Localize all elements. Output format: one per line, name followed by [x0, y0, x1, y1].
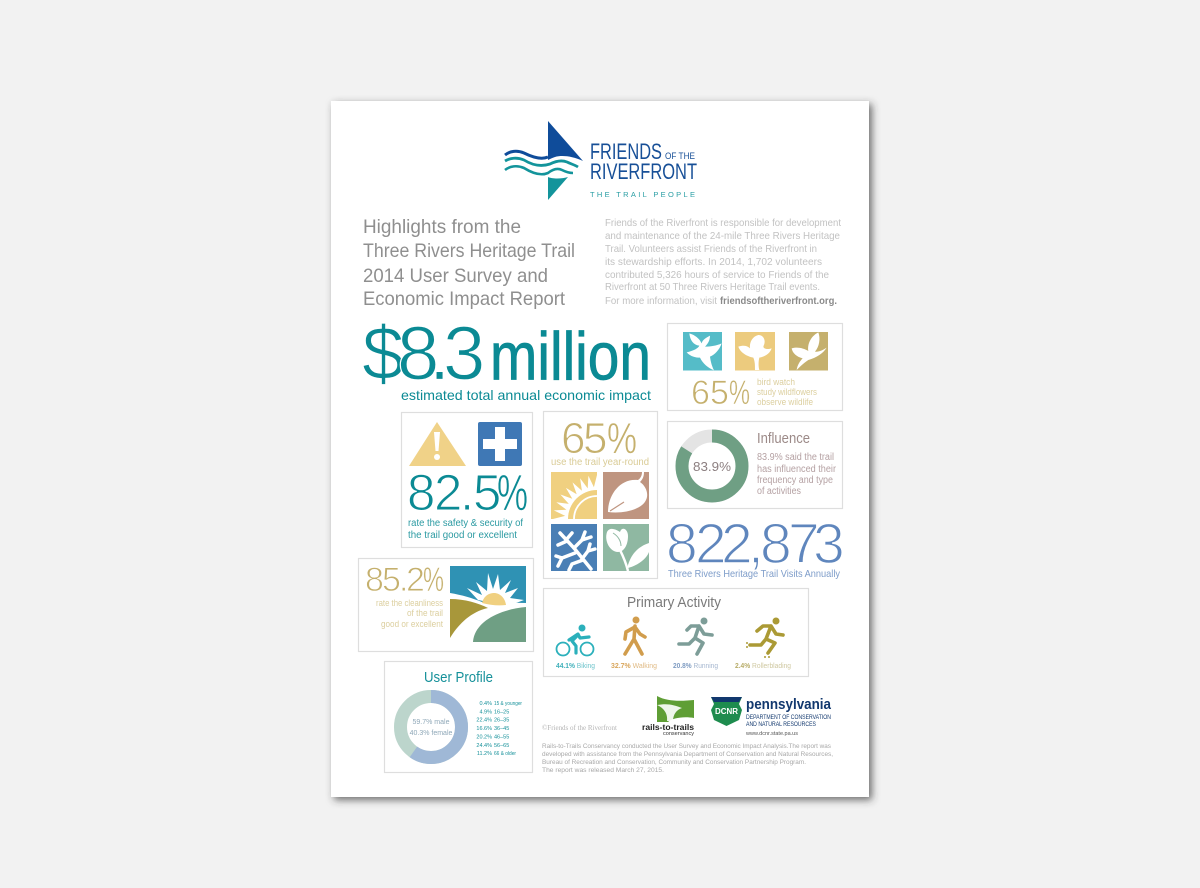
icon: warning triangle	[409, 422, 466, 466]
gender labels	[410, 719, 453, 737]
age breakdown: 4.9%	[479, 710, 492, 716]
intro paragraph: and maintenance of the 24-mile Three Rivers Heritage	[605, 230, 840, 242]
logo: Pennsylvania DCNR: DEPARTMENT OF CONSERVATION	[746, 715, 831, 721]
age breakdown: 26–35	[494, 718, 509, 724]
stat: 85.2%: 85.2	[365, 561, 425, 599]
logo: Friends of the Riverfront	[505, 121, 697, 200]
logo: Pennsylvania DCNR: AND NATURAL RESOURCES	[746, 722, 816, 728]
credits	[542, 743, 833, 774]
icon: wildflower	[735, 332, 775, 370]
credits: The report was released March 27, 2015.	[542, 767, 664, 774]
stat: 65%: %	[607, 414, 637, 463]
gender labels: 59.7% male	[413, 719, 450, 726]
user profile heading: User Profile	[424, 669, 493, 686]
activity labels: 20.8% Running	[673, 663, 718, 670]
age breakdown: 66 & older	[494, 751, 516, 757]
age breakdown	[476, 701, 522, 757]
age breakdown: 16–25	[494, 710, 509, 716]
year-round caption: use the trail year-round	[551, 457, 649, 468]
stat: 82.5%: 82.5	[407, 464, 501, 521]
cleanliness caption	[376, 598, 443, 629]
heading: Economic Impact Report	[363, 288, 566, 310]
cleanliness caption: of the trail	[407, 608, 443, 618]
influence description: frequency and type	[757, 475, 833, 486]
safety caption: the trail good or excellent	[408, 530, 517, 541]
influence description: has influenced their	[757, 464, 837, 475]
gender labels: 40.3% female	[410, 730, 453, 737]
paper sheet	[331, 101, 869, 797]
intro paragraph	[605, 217, 841, 307]
stat: annual visits: Three Rivers Heritage Trail Visits Annually	[668, 568, 841, 580]
age breakdown: 16.6%	[476, 726, 492, 732]
heading: Three Rivers Heritage Trail	[363, 240, 575, 262]
headline stat: $8.3 million: million	[490, 318, 651, 394]
influence description: 83.9% said the trail	[757, 452, 834, 463]
headline stat: $8.3 million	[362, 312, 651, 403]
intro paragraph: Trail. Volunteers assist Friends of the Riverfront in	[605, 243, 817, 255]
icon: rollerblading	[746, 618, 783, 658]
stat: 65%: 65	[691, 374, 729, 412]
activity labels	[556, 663, 791, 670]
icon: running	[679, 618, 712, 654]
influence description	[757, 452, 837, 497]
logo: Friends of the Riverfront: THE TRAIL PEOPLE	[590, 190, 695, 199]
heading: Highlights from the	[363, 216, 521, 238]
heading: 2014 User Survey and	[363, 265, 548, 287]
age breakdown: 20.2%	[476, 734, 492, 740]
intro paragraph: friendsoftheriverfront.org.	[720, 295, 837, 307]
copyright: ©Friends of the Riverfront	[542, 724, 617, 732]
panel: user profile	[384, 662, 532, 772]
icon: biking	[556, 624, 594, 656]
logo: Pennsylvania DCNR: pennsylvania	[746, 696, 832, 713]
credits: developed with assistance from the Pennsylvania Department of Conservation and Natural Resources,	[542, 751, 833, 758]
panel: safety and security	[402, 412, 532, 548]
panel: year-round use	[544, 412, 658, 578]
stat: annual visits: 822,873	[666, 512, 845, 576]
intro paragraph: Friends of the Riverfront is responsible for development	[605, 217, 841, 229]
logo: rails-to-trails conservancy	[642, 696, 695, 737]
panel: primary activity	[544, 588, 808, 676]
icon: medical cross	[478, 422, 522, 466]
donut chart: gender split	[400, 696, 462, 758]
intro paragraph: its stewardship efforts. In 2014, 1,702 volunteers	[605, 256, 822, 268]
logo: Pennsylvania DCNR: DCNR	[715, 707, 738, 716]
stat: 65%	[561, 414, 637, 463]
wildlife activities: study wildflowers	[757, 387, 817, 397]
intro paragraph: Riverfront at 50 Three Rivers Heritage Trail events.	[605, 281, 820, 293]
logo: Pennsylvania DCNR: www.dcnr.state.pa.us	[745, 731, 798, 737]
donut value: 83.9%	[693, 459, 731, 474]
influence description: of activities	[757, 486, 801, 497]
icon: hummingbird	[683, 332, 722, 370]
age breakdown: 36–45	[494, 726, 509, 732]
activity labels: 2.4% Rollerblading	[735, 663, 791, 670]
donut chart: 83.9% influenced	[682, 436, 742, 496]
age breakdown: 46–55	[494, 734, 509, 740]
icon: leaf	[603, 472, 649, 519]
panel: influence	[668, 422, 842, 508]
age breakdown: 56–65	[494, 743, 509, 749]
stat: 82.5%: %	[497, 464, 528, 521]
age breakdown: 24.4%	[476, 743, 492, 749]
stat: 65%: %	[729, 374, 750, 412]
wildlife activities	[757, 377, 817, 407]
wildlife activities: observe wildlife	[757, 397, 813, 407]
primary activity heading: Primary Activity	[627, 594, 721, 611]
logo: rails-to-trails conservancy: conservancy	[663, 731, 695, 737]
heading	[363, 216, 575, 310]
age breakdown: 0.4%	[479, 701, 492, 707]
icon: snowflake branch	[551, 524, 597, 571]
stat: 85.2%: %	[423, 561, 444, 599]
logo: Friends of the Riverfront: OF THE	[665, 151, 695, 161]
credits: Bureau of Recreation and Conservation, Community and Conservation Partnership Program.	[542, 759, 806, 766]
credits: Rails-to-Trails Conservancy conducted the User Survey and Economic Impact Analysis.The report was	[542, 743, 832, 750]
headline stat: $8.3 million: estimated total annual economic impact	[401, 387, 651, 403]
activity labels: 32.7% Walking	[611, 663, 657, 670]
icon: sunrise landscape	[450, 566, 526, 642]
logo: rails-to-trails conservancy: rails-to-trails	[642, 723, 695, 732]
panel: cleanliness	[358, 558, 534, 652]
activity labels: 44.1% Biking	[556, 663, 595, 670]
age breakdown: 22.4%	[476, 718, 492, 724]
intro paragraph: contributed 5,326 hours of service to Friends of the	[605, 269, 829, 281]
cleanliness caption: good or excellent	[381, 619, 443, 629]
headline stat: $8.3 million: $8.3	[362, 312, 485, 396]
intro paragraph: For more information, visit	[605, 295, 717, 307]
icon: butterfly	[789, 332, 828, 370]
stat: 65%: 65	[561, 414, 607, 463]
panel: wildlife	[668, 324, 842, 412]
cleanliness caption: rate the cleanliness	[376, 598, 443, 608]
safety caption	[408, 518, 523, 541]
icon: sun	[551, 472, 597, 519]
age breakdown: 11.2%	[477, 751, 492, 757]
icon: walking	[625, 616, 645, 654]
logo: Pennsylvania DCNR	[711, 696, 832, 737]
icon: tulip	[603, 524, 649, 571]
wildlife activities: bird watch	[757, 377, 795, 387]
logo: Friends of the Riverfront: FRIENDS	[590, 139, 662, 164]
influence heading: Influence	[757, 430, 810, 447]
safety caption: rate the safety & security of	[408, 518, 523, 529]
age breakdown: 15 & younger	[494, 701, 522, 707]
stat: 65%	[691, 374, 750, 412]
logo: Friends of the Riverfront: RIVERFRONT	[590, 159, 697, 184]
